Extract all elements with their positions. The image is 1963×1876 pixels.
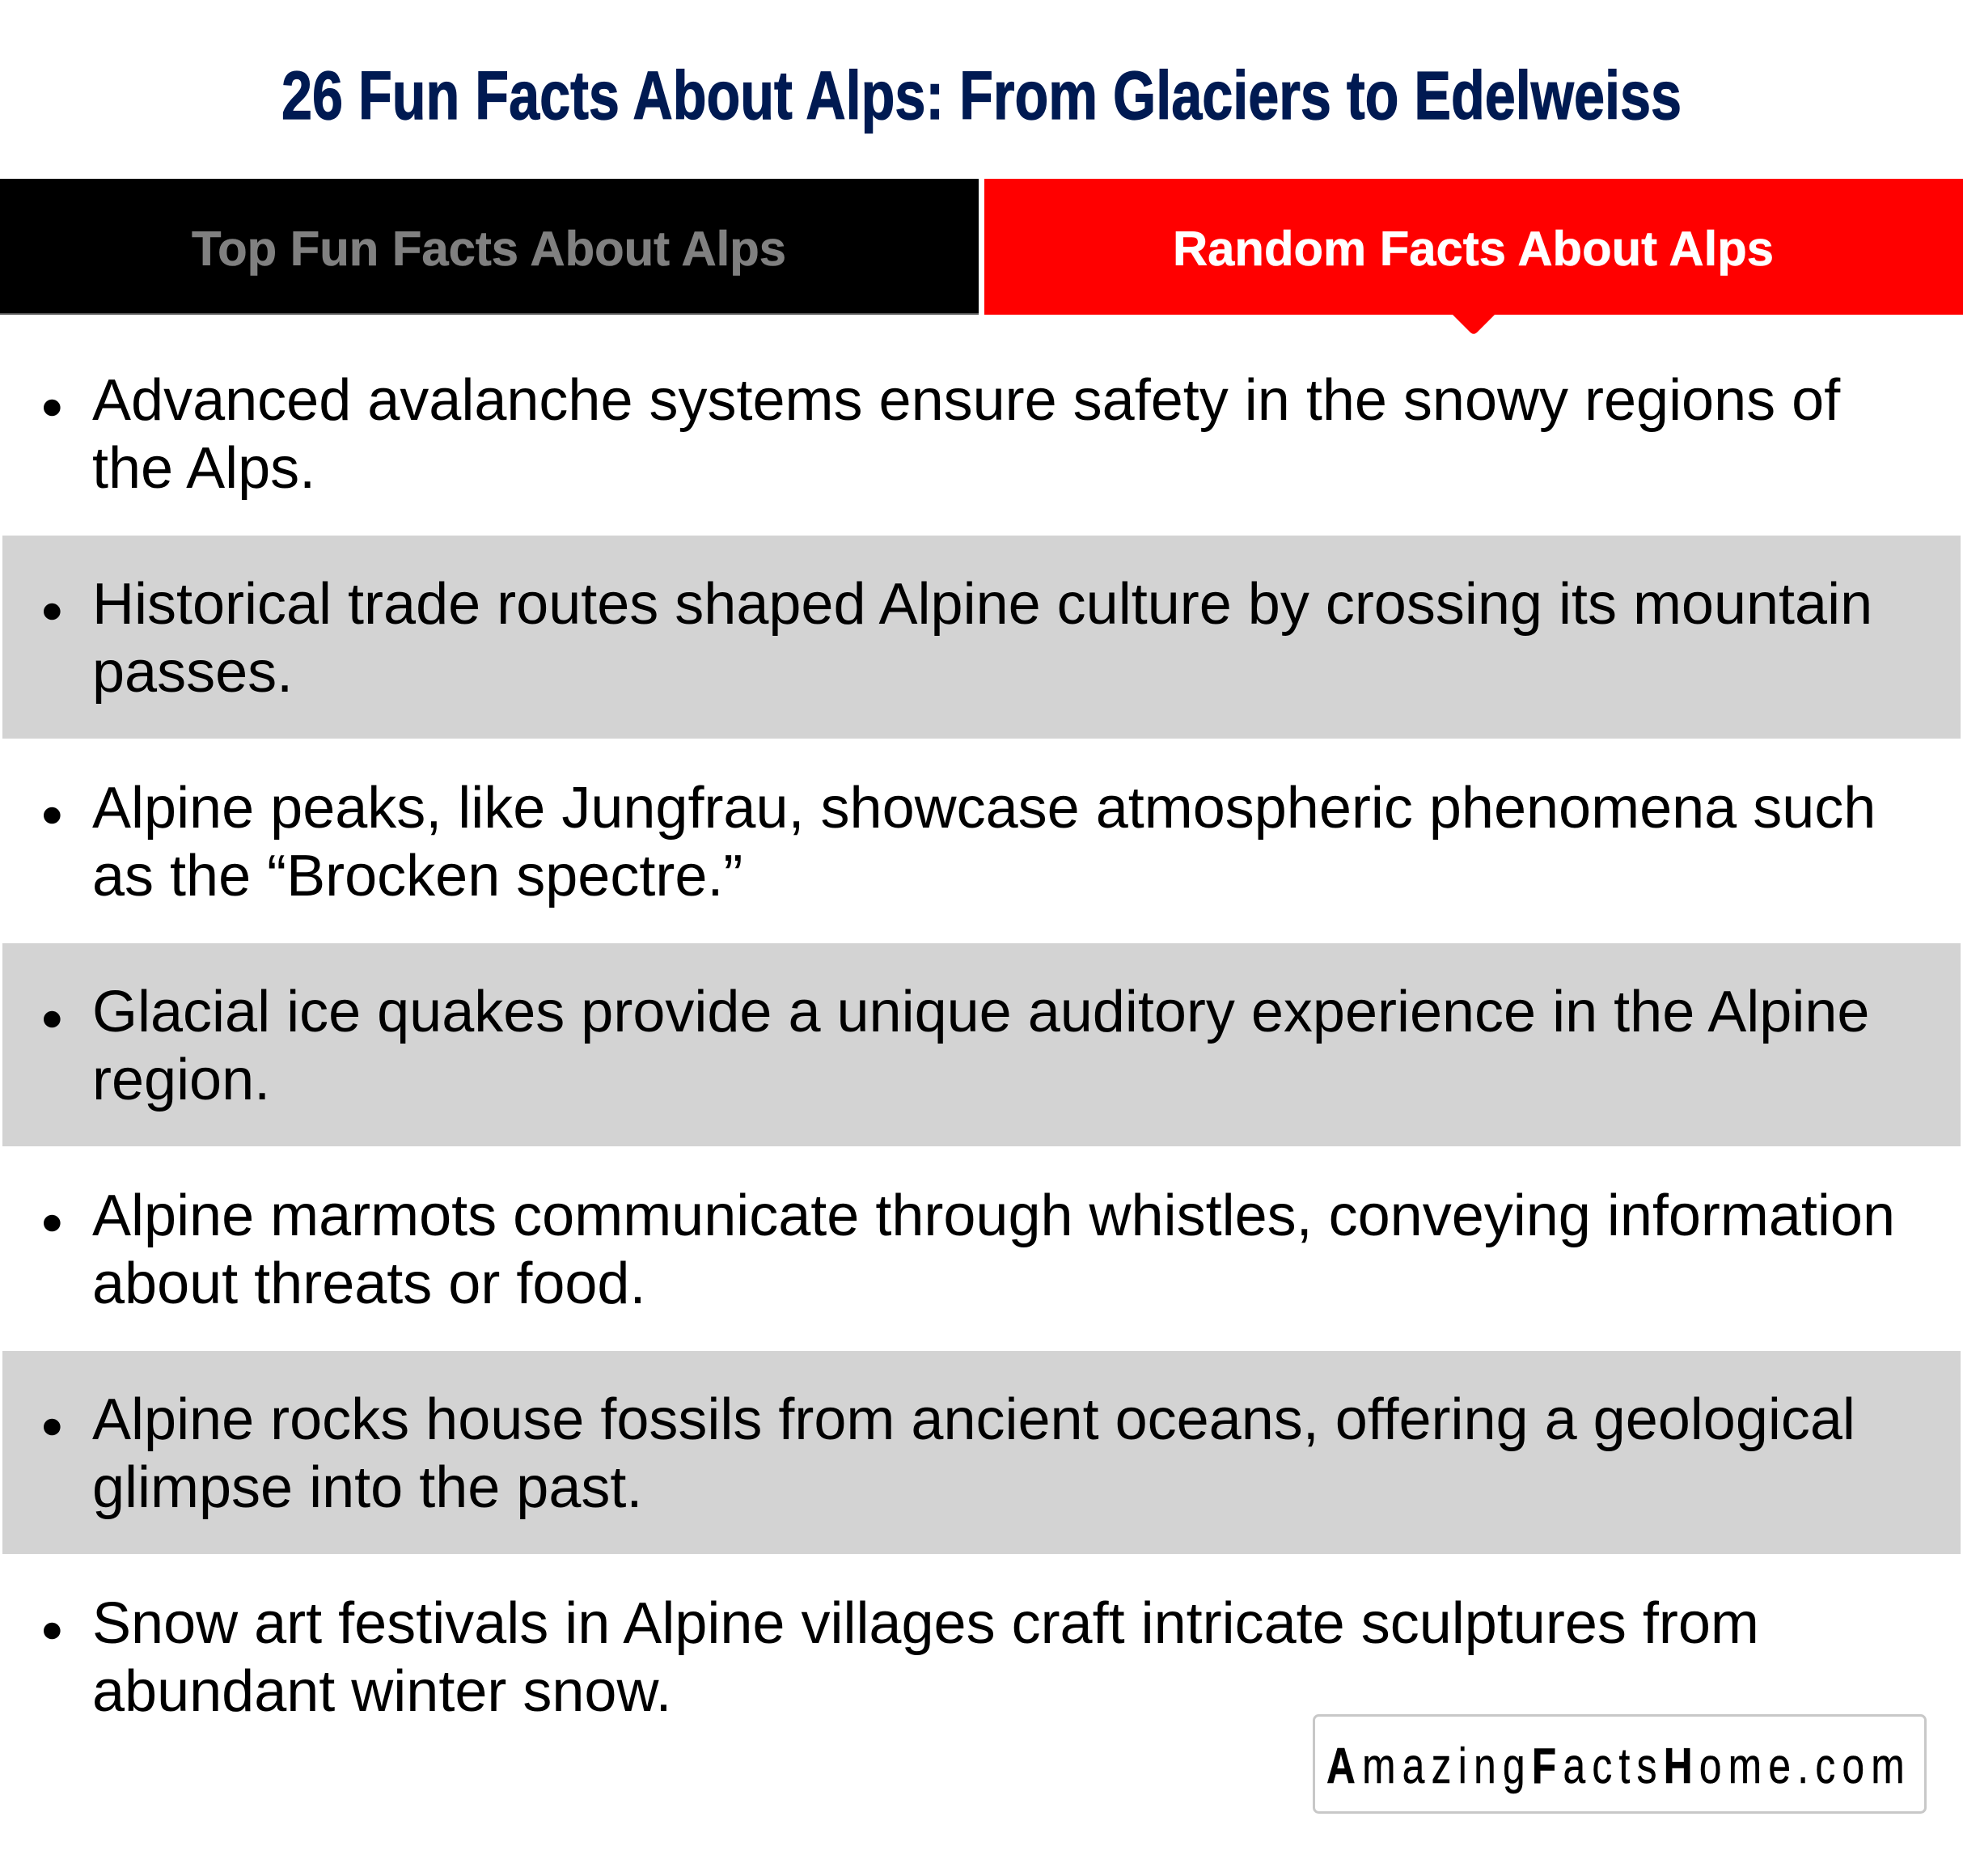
fact row 1: the Alps. <box>92 436 315 501</box>
fact row 5: about threats or food. <box>92 1251 645 1316</box>
fact row 3: Alpine peaks, like Jungfrau, showcase atmospheric phenomena such <box>92 776 1876 841</box>
fact row 2: Historical trade routes shaped Alpine culture by crossing its mountain <box>92 572 1872 637</box>
fact row 3: as the “Brocken spectre.” <box>92 844 742 908</box>
fact row 6 <box>2 1351 1961 1554</box>
fact row 3 <box>44 776 1876 908</box>
watermark: AmazingFactsHome.com <box>1326 1738 1911 1793</box>
fact row 5 <box>44 1184 1895 1316</box>
fact row 4 <box>2 943 1961 1146</box>
fact row 6: Alpine rocks house fossils from ancient oceans, offering a geological <box>92 1387 1855 1452</box>
tab: top fun facts: Top Fun Facts About Alps <box>192 221 786 276</box>
title: 26 Fun Facts About Alps: From Glaciers to Edelweiss <box>281 57 1682 133</box>
fact row 4: Glacial ice quakes provide a unique auditory experience in the Alpine <box>92 980 1869 1044</box>
fact row 7: Snow art festivals in Alpine villages craft intricate sculptures from <box>92 1591 1759 1656</box>
fact row 2 <box>2 536 1961 739</box>
fact row 5: Alpine marmots communicate through whistles, conveying information <box>92 1184 1895 1248</box>
fact row 7: abundant winter snow. <box>92 1659 671 1724</box>
fact row 2: passes. <box>92 640 293 705</box>
tab: random facts (active): Random Facts About Alps <box>1173 221 1774 276</box>
fact row 4: region. <box>92 1048 270 1112</box>
fact row 7 <box>44 1591 1759 1724</box>
watermark <box>1314 1715 1925 1812</box>
fact row 1: Advanced avalanche systems ensure safety in the snowy regions of <box>92 368 1841 433</box>
fact row 1 <box>44 368 1841 501</box>
tab: random facts (active) <box>984 179 1963 334</box>
fact row 6: glimpse into the past. <box>92 1455 642 1520</box>
tab: top fun facts <box>0 179 979 315</box>
